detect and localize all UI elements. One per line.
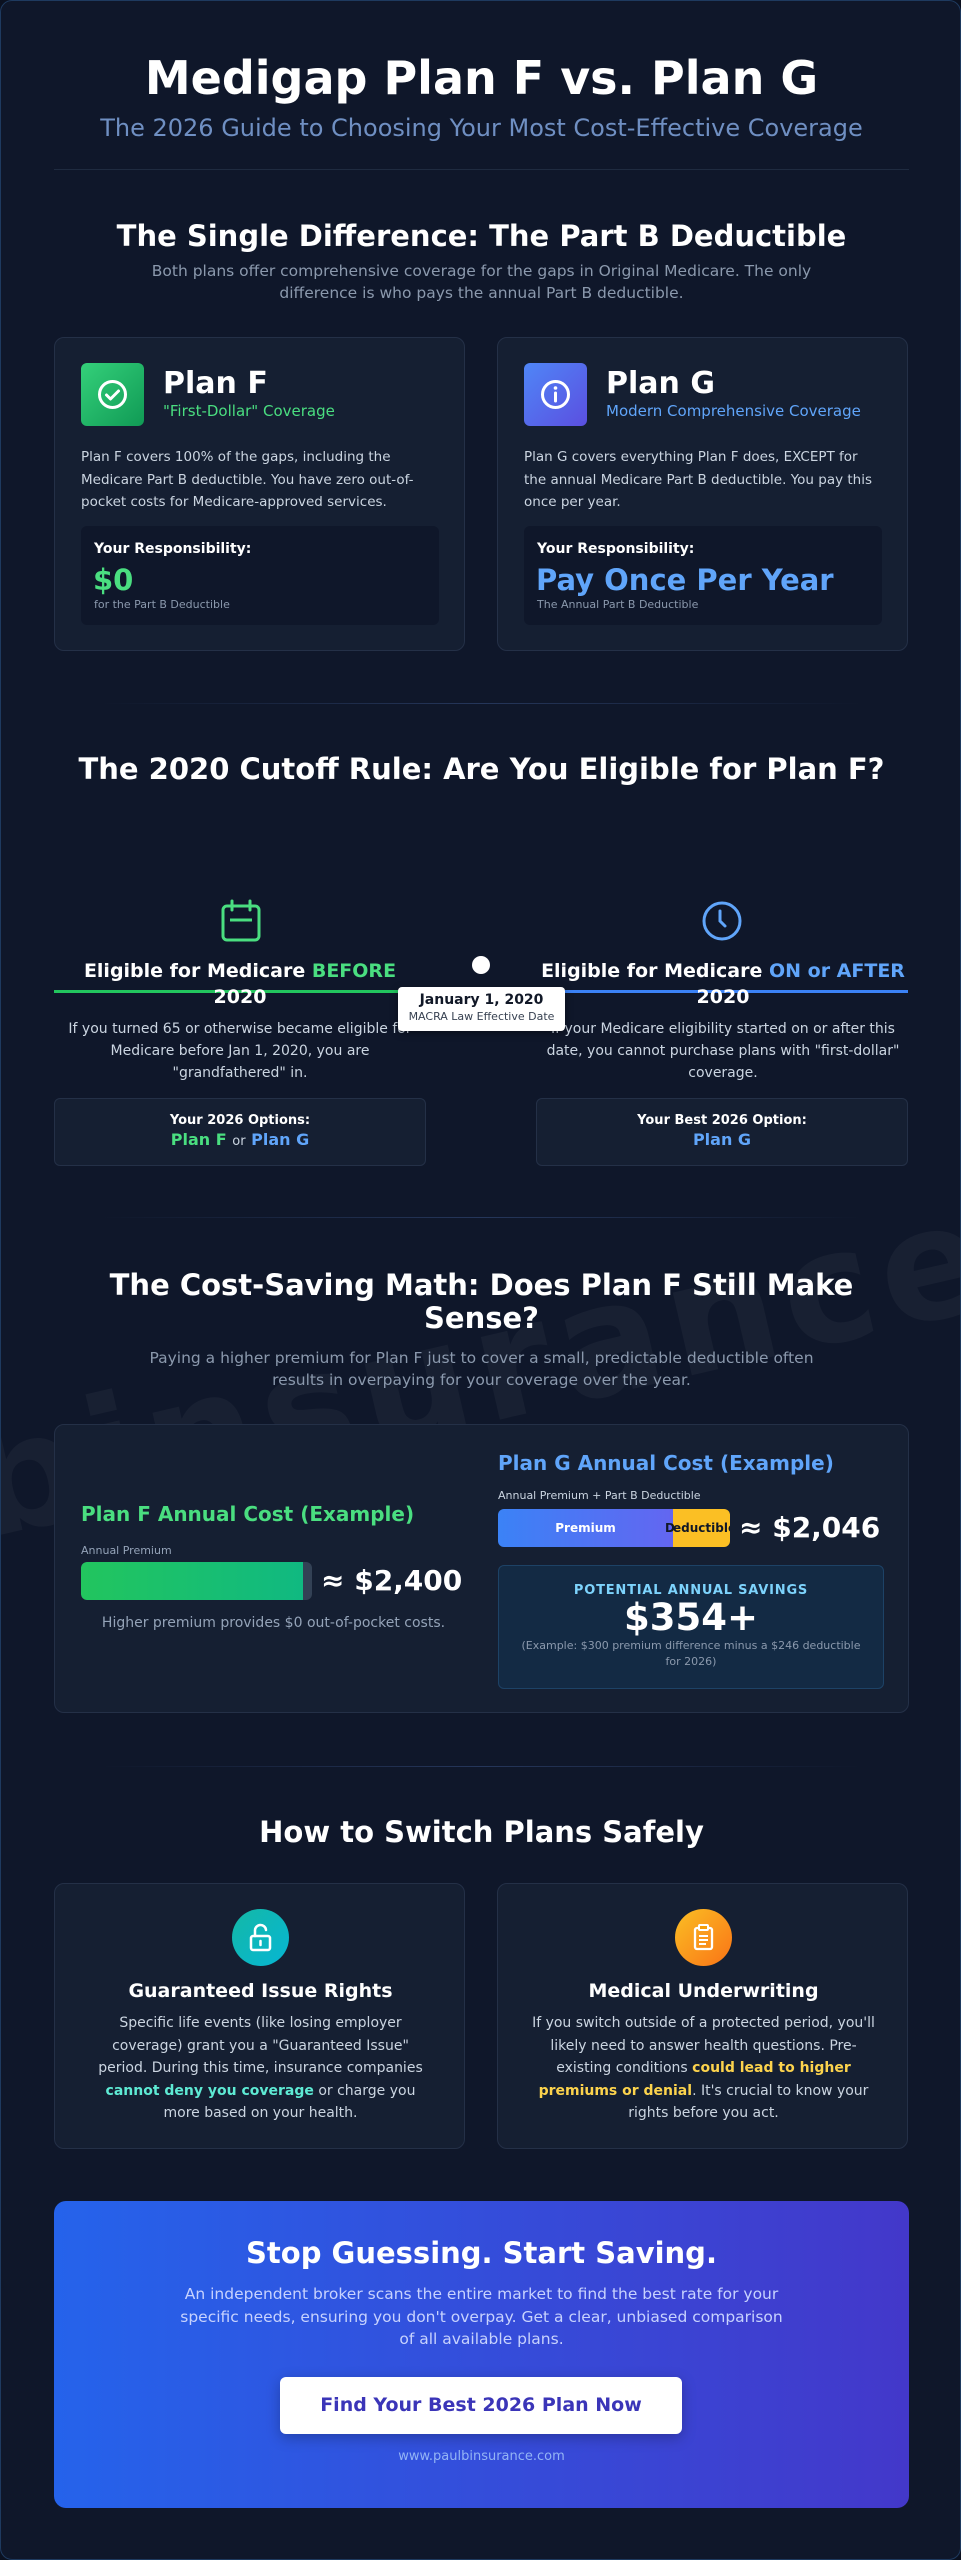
- text: after description: If your Medicare eligibility started on or after this date, you cannot purchase plans with "first-dollar" coverage.: [547, 1021, 899, 1081]
- icon: info: [524, 363, 587, 426]
- callout: January 1 2020: MACRA Law Effective Date: [409, 1010, 554, 1023]
- box: Plan F responsibility: [81, 526, 439, 625]
- button: find plan: [280, 2377, 682, 2434]
- heading: cost-saving math: The Cost-Saving Math: Does Plan F Still Make: [110, 1268, 853, 1302]
- text: cost intro: Paying a higher premium for Plan F just to cover a small, predictable deductible often results in overpaying for your coverage over the year.: [149, 1349, 814, 1389]
- chart: Plan G cost: ≈ $2,046: [739, 1511, 880, 1544]
- callout: potential savings: $354+: [624, 1596, 758, 1639]
- box: Plan F responsibility: Your Responsibility:: [94, 541, 251, 557]
- chart: Plan G cost: Annual Premium + Part B Deductible: [498, 1489, 701, 1502]
- chart: Plan F cost: Annual Premium: [81, 1544, 172, 1557]
- box: after option: Your Best 2026 Option:: [637, 1113, 807, 1128]
- heading: guaranteed issue: Guaranteed Issue Rights: [128, 1980, 393, 2002]
- chart: Plan G cost: Premium: [555, 1521, 616, 1535]
- box: Plan G responsibility: Pay Once Per Year: [536, 563, 834, 597]
- text: guaranteed issue body: Specific life events (like losing employer coverage) grant you a "Guaranteed Issue" period. During this time, insurance companies cannot deny you coverage or charge you more based on your health.: [98, 2015, 423, 2121]
- icon: clock: [702, 902, 742, 940]
- chart: Plan F cost: Higher premium provides $0 out-of-pocket costs.: [102, 1615, 445, 1631]
- chart: Plan F cost: Plan F Annual Cost (Example): [81, 1502, 414, 1526]
- heading: on or after 2020: 2020: [697, 986, 749, 1008]
- panel: Plan F: [54, 337, 465, 651]
- text: Plan G tagline: Modern Comprehensive Coverage: [606, 402, 861, 420]
- button: find plan: Find Your Best 2026 Plan Now: [320, 2394, 642, 2416]
- callout: potential savings: POTENTIAL ANNUAL SAVINGS: [574, 1583, 808, 1598]
- box: before options: Plan F or Plan G: [171, 1130, 309, 1149]
- icon: clipboard: [675, 1909, 732, 1966]
- callout: January 1 2020: [398, 987, 565, 1031]
- chart: Plan G cost: [498, 1451, 880, 1547]
- heading: before 2020: [84, 960, 396, 1008]
- chart: Plan G cost: D: [665, 1521, 675, 1535]
- box: Plan G responsibility: Your Responsibility:: [537, 541, 694, 557]
- box: before options: Your 2026 Options:: [170, 1113, 310, 1128]
- heading: on or after 2020: Eligible for Medicare ON or AFTER: [541, 960, 905, 982]
- text: Plan F tagline: "First-Dollar" Coverage: [163, 402, 335, 420]
- box: Plan F responsibility: $0: [93, 563, 133, 597]
- timeline dot: [472, 956, 490, 974]
- timeline line blue: [565, 990, 908, 993]
- chart: Plan F cost: ≈ $2,400: [321, 1564, 462, 1597]
- callout: potential savings: [498, 1565, 884, 1689]
- heading: CTA: Stop Guessing. Start Saving.: [246, 2236, 717, 2270]
- timeline: [54, 900, 908, 1166]
- chart: Plan F cost: [81, 1502, 462, 1631]
- box: after option: [536, 1098, 908, 1166]
- chart: Plan G cost: Plan G Annual Cost (Example): [498, 1451, 834, 1475]
- text: before description: If you turned 65 or otherwise became eligible for Medicare before Jan 1, 2020, you are "grandfathered" in.: [68, 1021, 412, 1081]
- heading: cost-saving math: [110, 1268, 853, 1335]
- icon: unlock: [232, 1909, 289, 1966]
- panel: medical underwriting: [497, 1883, 908, 2149]
- box: before options: [54, 1098, 426, 1166]
- text: website: www.paulbinsurance.com: [398, 2449, 565, 2464]
- text: Plan G description: Plan G covers everything Plan F does, EXCEPT for the annual Medicare Part B deductible. You pay this once per year.: [524, 449, 872, 510]
- title: Medigap Plan F vs. Plan G: [145, 51, 818, 105]
- heading: Plan G: Plan G: [606, 366, 715, 401]
- heading: on or after 2020: [541, 960, 905, 1008]
- panel: call to action: [54, 2201, 909, 2508]
- text: Plan F description: Plan F covers 100% of the gaps, including the Medicare Part B deductible. You have zero out-of-pocket costs for Medicare-approved services.: [81, 449, 414, 510]
- heading: medical underwriting: Medical Underwriting: [588, 1980, 819, 2002]
- callout: January 1 2020: January 1, 2020: [420, 992, 543, 1008]
- panel: guaranteed issue: [54, 1883, 465, 2149]
- heading: Plan F: Plan F: [163, 366, 268, 401]
- heading: before 2020: 2020: [214, 986, 266, 1008]
- heading: 2020 cutoff: The 2020 Cutoff Rule: Are You Eligible for Plan F?: [78, 752, 885, 786]
- heading: how to switch: How to Switch Plans Safely: [259, 1815, 704, 1849]
- box: Plan G responsibility: The Annual Part B Deductible: [537, 598, 698, 611]
- text: single difference intro: Both plans offer comprehensive coverage for the gaps in Original Medicare. The only difference is who pays the annual Part B deductible.: [152, 262, 811, 302]
- panel: cost comparison: [54, 1424, 909, 1713]
- panel: Plan G: [497, 337, 908, 651]
- icon: check: [81, 363, 144, 426]
- heading: single difference: The Single Difference: The Part B Deductible: [117, 219, 846, 253]
- icon: calendar: [222, 900, 260, 942]
- box: Plan F responsibility: for the Part B Deductible: [94, 598, 230, 611]
- timeline line green: [54, 990, 399, 993]
- heading: before 2020: Eligible for Medicare BEFORE: [84, 960, 396, 982]
- subtitle: The 2026 Guide to Choosing Your Most Cost-Effective Coverage: [100, 114, 863, 142]
- text: underwriting body: If you switch outside of a protected period, you'll likely need to answer health questions. Pre-existing conditions could lead to higher premiums or denial. It's crucial to know your rights before you act.: [532, 2015, 875, 2121]
- text: CTA body: An independent broker scans the entire market to find the best rate for your specific needs, ensuring you don't overpay. Get a clear, unbiased comparison of all available plans.: [180, 2285, 783, 2348]
- callout: potential savings: (Example: $300 premium difference minus a $246 deductible for 2026): [521, 1639, 860, 1668]
- box: after option: Plan G: [693, 1130, 751, 1149]
- heading: cost-saving math: Sense?: [424, 1301, 539, 1335]
- box: Plan G responsibility: [524, 526, 882, 625]
